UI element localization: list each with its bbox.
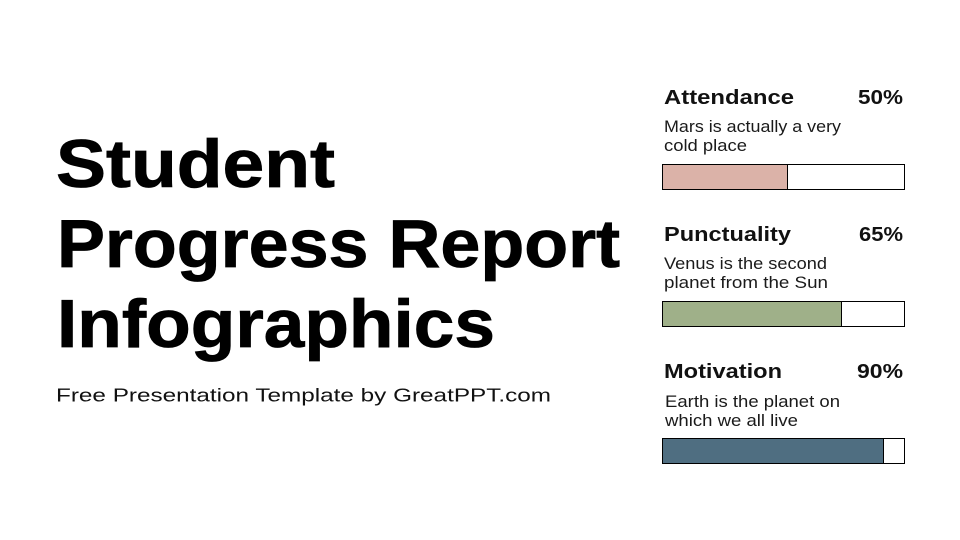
attendance progress bar — [662, 164, 904, 190]
motivation percentage: 90% — [857, 361, 903, 383]
motivation description: which we all live — [664, 411, 798, 430]
motivation progress bar — [662, 438, 904, 464]
attendance heading: Attendance — [664, 87, 794, 109]
punctuality description — [664, 254, 828, 292]
punctuality heading: Punctuality — [664, 224, 792, 246]
panel: punctuality — [662, 224, 904, 326]
title: Student — [56, 126, 335, 202]
punctuality description: planet from the Sun — [664, 273, 828, 292]
attendance description — [664, 117, 842, 155]
panel: motivation — [662, 361, 904, 464]
attendance description: cold place — [664, 136, 747, 155]
subtitle: Free Presentation Template by GreatPPT.com — [56, 384, 551, 406]
panel: attendance — [662, 87, 904, 190]
motivation description — [664, 392, 840, 430]
title: Progress Report — [57, 206, 620, 282]
attendance description: Mars is actually a very — [664, 117, 842, 136]
punctuality percentage: 65% — [859, 224, 903, 246]
attendance percentage: 50% — [858, 87, 903, 109]
punctuality progress bar — [662, 302, 904, 326]
motivation description: Earth is the planet on — [665, 392, 840, 411]
title: Infographics — [57, 286, 495, 362]
title — [56, 126, 620, 362]
punctuality description: Venus is the second — [664, 254, 827, 273]
motivation heading: Motivation — [664, 361, 782, 383]
